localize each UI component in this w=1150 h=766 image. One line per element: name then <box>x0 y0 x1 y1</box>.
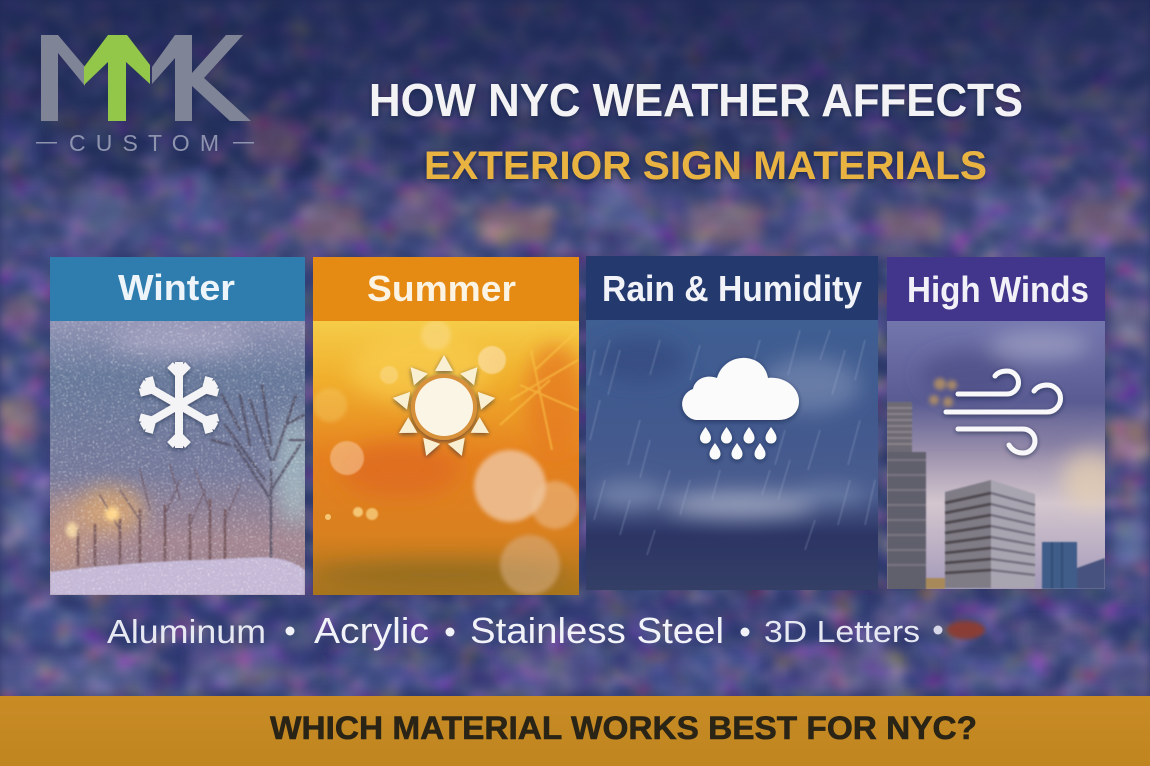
separator dot <box>286 626 294 636</box>
title line 2: EXTERIOR SIGN MATERIALS <box>424 144 987 188</box>
faded red item <box>947 621 985 639</box>
rain streaks <box>588 330 875 555</box>
logo letters M and K <box>41 35 251 121</box>
panel: winter <box>41 257 315 595</box>
title line 1: HOW NYC WEATHER AFFECTS <box>369 74 1023 126</box>
rain photo <box>586 320 878 590</box>
separator dot <box>740 628 750 636</box>
high winds header: High Winds <box>907 269 1089 310</box>
summer photo <box>310 320 585 595</box>
bokeh circles <box>313 320 579 595</box>
high winds header <box>887 257 1105 321</box>
banner question: WHICH MATERIAL WORKS BEST FOR NYC? <box>270 710 977 746</box>
panel: summer <box>310 257 585 595</box>
winter photo <box>41 321 315 595</box>
panel: high winds <box>887 257 1118 592</box>
logo green arrow <box>84 35 150 121</box>
winter header: Winter <box>118 267 235 308</box>
buildings <box>887 402 1105 592</box>
summer header <box>313 257 579 321</box>
panel: rain and humidity <box>586 256 878 590</box>
bare trees <box>78 385 304 565</box>
icon: sun <box>391 355 497 459</box>
logo custom wordmark: CUSTOM <box>69 130 219 156</box>
separator dot <box>446 628 454 636</box>
icon: wind <box>946 371 1060 453</box>
materials list <box>107 610 985 651</box>
icon: rain cloud <box>682 358 799 460</box>
separator dot <box>934 626 942 634</box>
sparkle streaks <box>500 340 578 450</box>
rain header: Rain & Humidity <box>602 268 862 309</box>
material: aluminum: Aluminum <box>107 613 266 650</box>
summer header: Summer <box>367 268 516 309</box>
snowy ground <box>50 557 305 595</box>
winter header <box>50 257 305 321</box>
material: acrylic: Acrylic <box>314 610 429 651</box>
logo: MMK Custom <box>36 35 254 156</box>
material: stainless steel: Stainless Steel <box>470 610 724 651</box>
icon: snowflake <box>137 362 221 448</box>
rain header <box>586 256 878 320</box>
bokeh lights <box>929 378 957 407</box>
title <box>369 74 1023 188</box>
material: 3D letters: 3D Letters <box>764 614 920 649</box>
high winds photo <box>887 321 1118 592</box>
bottom banner <box>0 696 1150 766</box>
